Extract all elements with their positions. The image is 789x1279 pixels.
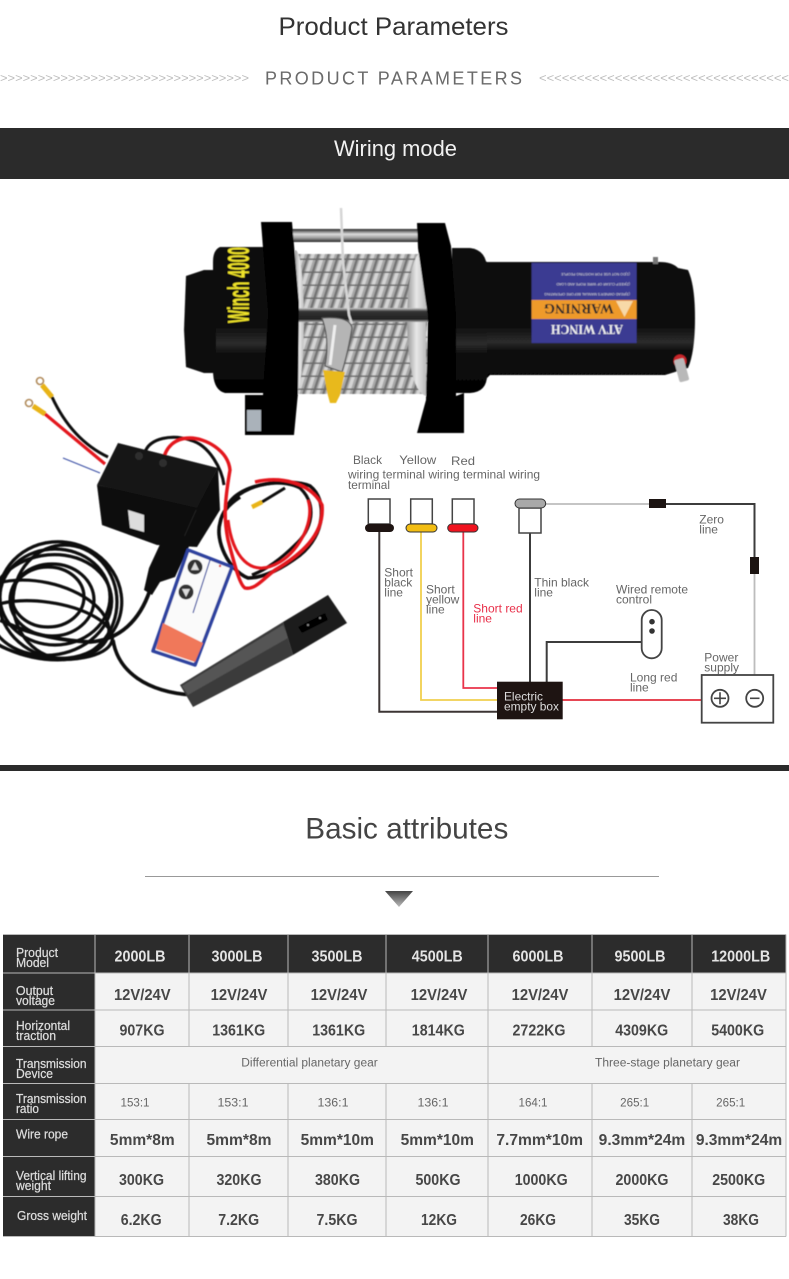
diagram labels: Black (353, 453, 383, 467)
transmission ratio row: 136:1 (318, 1098, 348, 1110)
right bracket (417, 223, 464, 433)
model header row: 2000LB (114, 949, 166, 966)
right gear housing (452, 248, 487, 393)
heading rule (145, 876, 659, 877)
horizontal traction row (120, 1023, 764, 1040)
row labels: Output (16, 983, 53, 998)
model header row: 3500LB (312, 949, 362, 966)
diagram labels: black (384, 576, 413, 590)
warning label: (1)DO NOT USE FOR HOISTING PEOPLE (560, 272, 630, 276)
left gearbox drum (213, 247, 268, 393)
terminal bolt (653, 257, 689, 383)
transmission ratio row: 153:1 (218, 1098, 248, 1110)
output voltage row: 12V/24V (614, 987, 671, 1004)
gross weight row (121, 1212, 759, 1229)
knob (184, 270, 216, 373)
gross weight row: 7.5KG (316, 1212, 358, 1229)
thin black terminal (515, 499, 546, 533)
vertical lifting weight row: 500KG (416, 1172, 460, 1189)
battery (702, 675, 773, 723)
black terminal (365, 499, 394, 532)
gross weight row: 7.2KG (218, 1212, 259, 1229)
row labels: Device (16, 1066, 53, 1081)
row labels: traction (16, 1028, 56, 1043)
table grid (3, 934, 786, 1236)
diagram labels (347, 453, 739, 695)
row labels: Gross weight (17, 1208, 87, 1223)
vertical lifting weight row: 380KG (315, 1172, 360, 1189)
top chrome bar (290, 229, 420, 242)
horizontal traction row: 2722KG (512, 1023, 566, 1040)
diagram labels: line (426, 602, 445, 616)
subtitle banner: <<<<<<<<<<<<<<<<<<<<<<<<<<<<<<<<< (539, 71, 789, 85)
red terminal (448, 499, 478, 532)
basic attributes heading: Basic attributes (305, 812, 508, 846)
row labels: Transmission (16, 1091, 86, 1106)
output voltage row: 12V/24V (211, 987, 268, 1004)
output voltage row: 12V/24V (710, 987, 767, 1004)
subtitle banner (0, 68, 789, 88)
foot highlight (247, 410, 261, 431)
warning label: ATV WINCH (551, 321, 623, 336)
diagram labels: terminal (348, 478, 390, 492)
row labels: Model (16, 955, 49, 970)
vertical lifting weight row: 320KG (216, 1172, 262, 1189)
vertical lifting weight row: 1000KG (515, 1172, 568, 1189)
diagram labels: Power (704, 651, 738, 665)
winch photo illustration (184, 208, 695, 435)
row labels: Vertical lifting (16, 1168, 86, 1183)
warning label: (2)KEEP CLEAR OF WIRE ROPE AND LOAD (556, 282, 630, 286)
diagram labels: Zero (699, 512, 724, 526)
row labels: Wire rope (16, 1126, 68, 1142)
gross weight row: 26KG (520, 1212, 556, 1229)
model header row: 6000LB (512, 949, 564, 966)
diagram labels: Short (426, 582, 455, 596)
row labels: weight (15, 1178, 51, 1193)
wired handle (180, 595, 347, 707)
vertical lifting weight row: 300KG (119, 1172, 164, 1189)
output voltage row: 12V/24V (411, 987, 468, 1004)
diagram labels: line (630, 681, 649, 695)
output voltage row (114, 987, 767, 1004)
diagram labels: line (699, 522, 718, 536)
diagram labels: control (616, 592, 652, 606)
model header row: 3000LB (212, 949, 262, 966)
diagram labels: supply (704, 661, 739, 675)
coiled red and black wires (145, 437, 322, 588)
wire rope row: 5mm*10m (301, 1132, 374, 1149)
vertical lifting weight row: 2500KG (712, 1172, 765, 1189)
row labels: Transmission (16, 1056, 86, 1071)
transmission ratio row (120, 1098, 745, 1110)
down arrow (385, 891, 413, 907)
diagram labels: wiring terminal wiring terminal wiring (347, 468, 540, 482)
title: Product Parameters (278, 13, 508, 41)
transmission device row: Three-stage planetary gear (595, 1058, 740, 1070)
wire rope row (110, 1132, 782, 1149)
wires (379, 504, 754, 712)
transmission ratio row: 265:1 (716, 1098, 745, 1110)
model header row: 4500LB (412, 949, 463, 966)
transmission device row (241, 1058, 740, 1070)
wire rope row: 9.3mm*24m (599, 1132, 685, 1149)
horizontal traction row: 1814KG (412, 1023, 465, 1040)
control box (97, 443, 220, 547)
electric box: Electric (504, 690, 543, 704)
model header row: 12000LB (711, 949, 770, 966)
motor body (480, 258, 695, 385)
wire rope row: 5mm*8m (206, 1132, 272, 1149)
wired remote (642, 610, 662, 658)
section divider bar (0, 765, 789, 771)
gross weight row: 12KG (421, 1212, 457, 1229)
transmission ratio row: 265:1 (620, 1098, 649, 1110)
row labels: ratio (16, 1101, 39, 1116)
row labels: Horizontal (16, 1018, 70, 1033)
subtitle banner: >>>>>>>>>>>>>>>>>>>>>>>>>>>>>>>>> (0, 71, 249, 85)
wiring mode heading band: Wiring mode (334, 136, 457, 161)
diagram labels: Thin black (534, 576, 590, 590)
row labels: Product (16, 945, 58, 960)
warning label (532, 263, 637, 343)
diagram labels: Red (451, 454, 475, 468)
left bracket (245, 222, 299, 435)
vertical lifting weight row (119, 1172, 765, 1189)
horizontal traction row: 1361KG (212, 1023, 265, 1040)
wiring diagram (347, 453, 773, 723)
inline connector (750, 557, 759, 574)
diagram labels: line (473, 612, 492, 626)
gross weight row: 35KG (624, 1212, 660, 1229)
output voltage row: 12V/24V (311, 987, 368, 1004)
transmission ratio row: 164:1 (518, 1098, 548, 1110)
gross weight row: 6.2KG (121, 1212, 162, 1229)
wiring mode heading band (0, 128, 789, 179)
wire rope row: 5mm*10m (401, 1132, 474, 1149)
output voltage row: 12V/24V (512, 987, 569, 1004)
ring terminal leads (26, 378, 108, 473)
winch photo illustration: Winch 4000 (221, 247, 256, 323)
table backgrounds (3, 934, 786, 1236)
wire rope row: 5mm*8m (110, 1132, 175, 1149)
diagram labels: Yellow (399, 453, 437, 467)
row labels: voltage (16, 993, 55, 1008)
output voltage row: 12V/24V (114, 987, 171, 1004)
cable tie and hook end (322, 208, 352, 403)
subtitle banner: PRODUCT PARAMETERS (265, 68, 522, 88)
wireless handset (153, 550, 232, 665)
cable coil (0, 528, 192, 695)
middle tie bar (297, 308, 429, 322)
horizontal traction row: 4309KG (615, 1023, 668, 1040)
transmission device row: Differential planetary gear (241, 1058, 378, 1070)
electric box: empty box (504, 700, 559, 714)
diagram labels: Short red (473, 602, 523, 616)
diagram labels: Long red (630, 671, 677, 685)
inline connector (649, 499, 666, 508)
transmission ratio row: 136:1 (418, 1098, 448, 1110)
wireless remote kit illustration (0, 378, 347, 707)
wire rope row: 9.3mm*24m (696, 1132, 782, 1149)
warning label: (3)READ OWNER'S MANUAL BEFORE OPERATING (544, 292, 630, 296)
transmission ratio row: 153:1 (120, 1098, 150, 1110)
model header row: 9500LB (614, 949, 666, 966)
gross weight row: 38KG (723, 1212, 759, 1229)
wire rope row: 7.7mm*10m (496, 1132, 583, 1149)
horizontal traction row: 907KG (120, 1023, 164, 1040)
yellow terminal (406, 499, 437, 532)
diagram labels: line (534, 586, 553, 600)
horizontal traction row: 1361KG (312, 1023, 365, 1040)
wire rope drum (295, 248, 427, 396)
diagram labels: Short (384, 566, 414, 580)
plug (144, 527, 192, 595)
electric box (497, 682, 563, 719)
horizontal traction row: 5400KG (711, 1023, 764, 1040)
model header row (114, 949, 770, 966)
row labels (15, 945, 87, 1223)
specifications table (3, 934, 786, 1236)
vertical lifting weight row: 2000KG (616, 1172, 668, 1189)
diagram labels: line (384, 586, 403, 600)
diagram labels: yellow (426, 592, 460, 606)
diagram labels: Wired remote (616, 582, 688, 596)
warning label: WARNING (544, 300, 614, 316)
